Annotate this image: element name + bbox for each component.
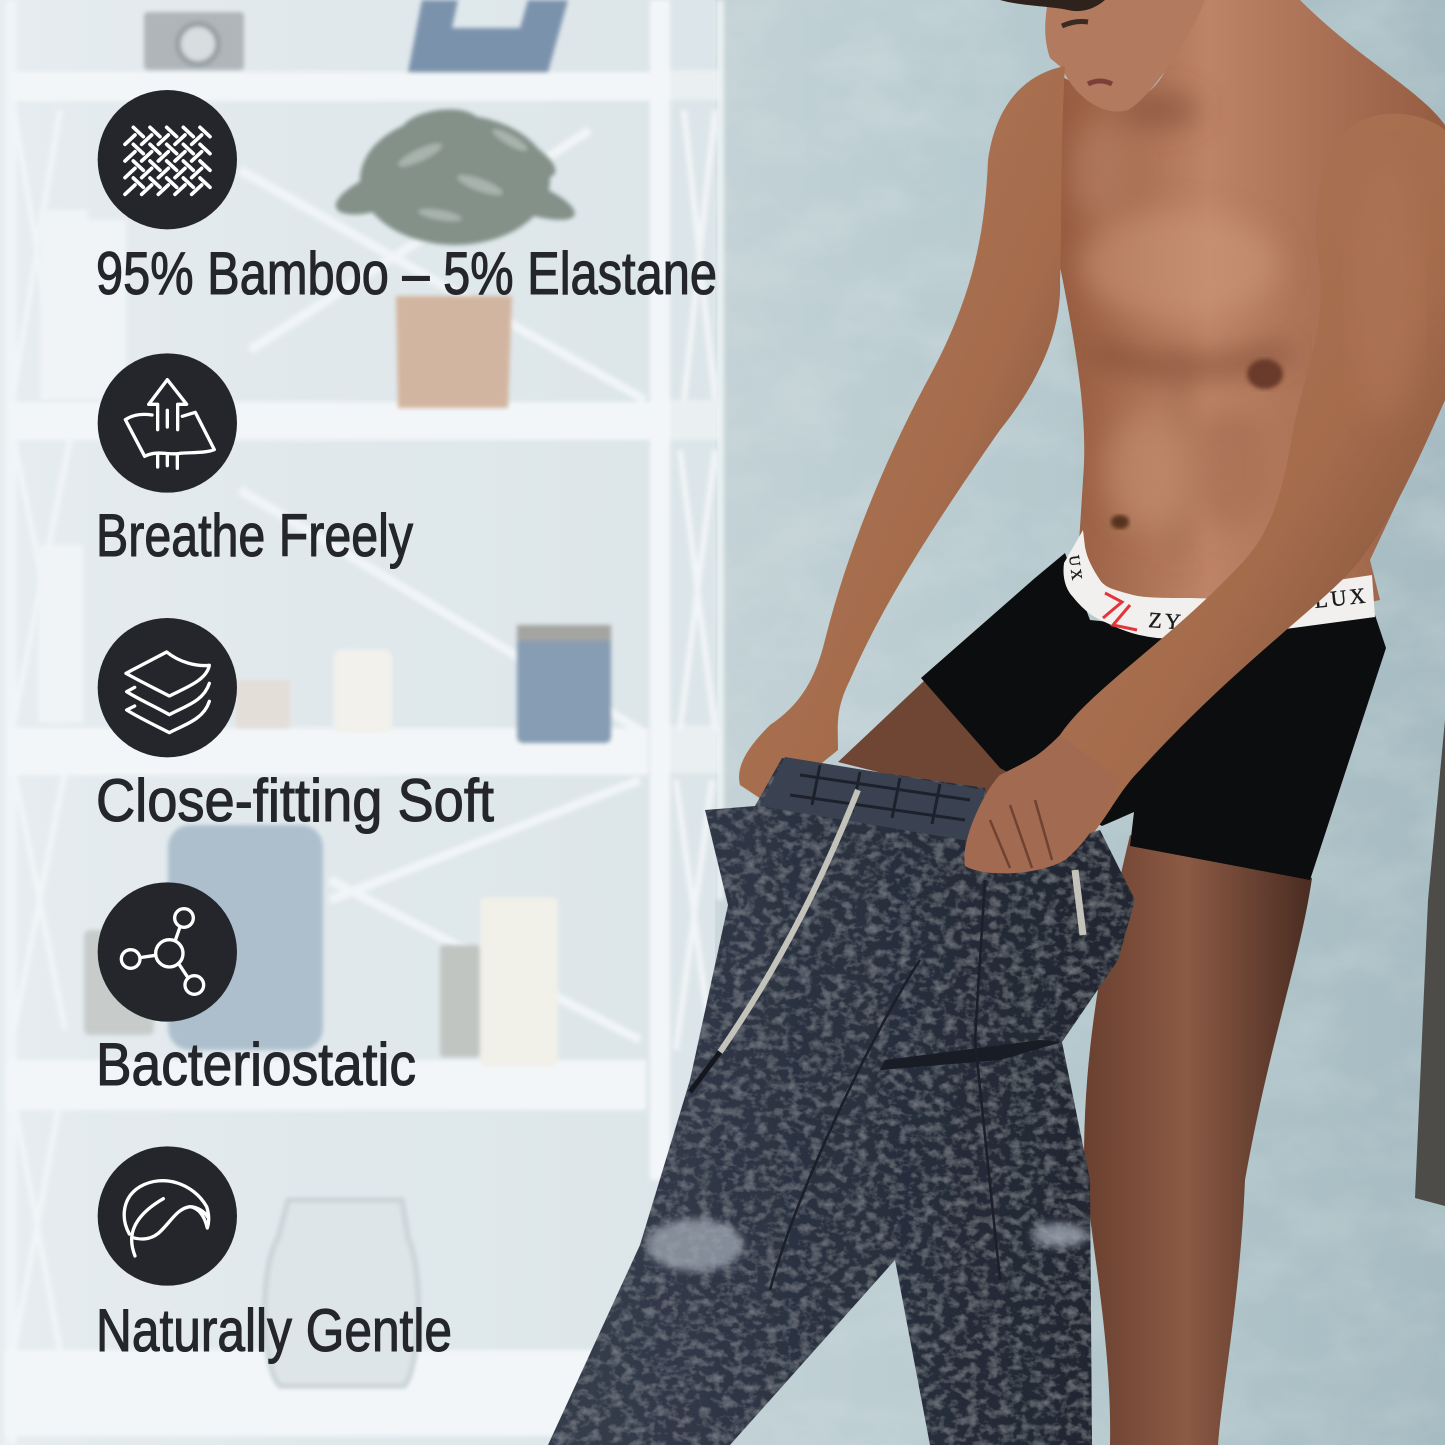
torso xyxy=(1050,0,1445,640)
muscle shading xyxy=(1070,92,1290,560)
blue vase xyxy=(168,825,323,1050)
boxer briefs xyxy=(921,553,1386,880)
seam xyxy=(770,880,1000,1290)
nipple xyxy=(1247,359,1283,389)
right arm xyxy=(964,114,1445,873)
label: bacteriostatic: Bacteriostatic xyxy=(96,1031,416,1098)
icon: weave fabric xyxy=(98,90,237,229)
books xyxy=(38,210,126,723)
brand name left: ZY xyxy=(1148,607,1185,634)
hands over waist xyxy=(964,735,1120,873)
waistband gather xyxy=(760,757,985,842)
hanging garment at right edge xyxy=(1415,720,1445,1206)
shelf objects xyxy=(38,0,611,1386)
label: fabric composition: 95% Bamboo – 5% Elastane xyxy=(96,240,717,307)
label: close-fitting soft: Close-fitting Soft xyxy=(96,767,494,834)
feature 1 xyxy=(96,90,717,307)
candle and lantern xyxy=(236,625,611,743)
back leg skin xyxy=(838,680,1010,800)
navel xyxy=(1111,515,1129,529)
feature 4 xyxy=(96,882,416,1098)
drawstring xyxy=(720,790,858,1052)
left arm xyxy=(739,66,1065,805)
icon: breathable arrow xyxy=(98,353,237,493)
logo xyxy=(1103,593,1137,630)
shelf unit xyxy=(4,0,724,1445)
feature 3 xyxy=(96,618,494,834)
picture frame xyxy=(408,0,568,72)
glass jar xyxy=(265,1200,418,1386)
camera xyxy=(144,12,244,70)
white haze xyxy=(0,0,720,1445)
label: naturally gentle: Naturally Gentle xyxy=(96,1297,452,1364)
brand name side: UX xyxy=(1065,554,1085,584)
waistband xyxy=(1063,530,1375,640)
icon: leaf xyxy=(98,1146,237,1286)
plant xyxy=(330,105,580,408)
jeans xyxy=(548,757,1135,1445)
icon: molecule xyxy=(98,882,237,1022)
worn patch xyxy=(647,1219,1088,1271)
concrete wall xyxy=(715,0,1445,1445)
head xyxy=(1000,0,1205,111)
front leg xyxy=(1084,835,1312,1445)
feature 2 xyxy=(96,353,413,569)
brand name right: LUX xyxy=(1313,582,1369,613)
label: breathe freely: Breathe Freely xyxy=(96,502,413,569)
feature 5 xyxy=(96,1146,452,1364)
tall candle and glass xyxy=(84,897,558,1067)
icon: soft layers xyxy=(98,618,237,757)
man figure xyxy=(548,0,1445,1445)
